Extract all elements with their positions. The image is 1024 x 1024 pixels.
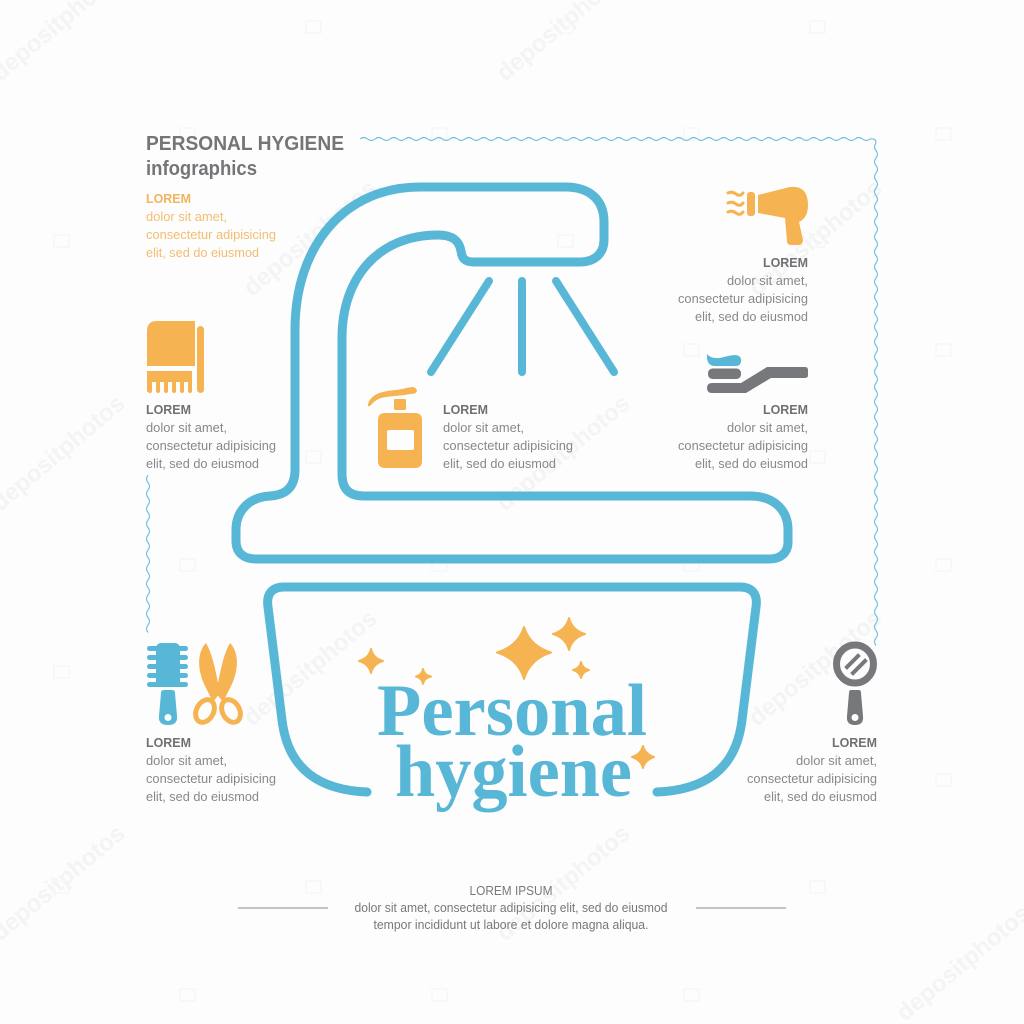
text block: orange intro: elit, sed do eiusmod xyxy=(146,245,259,260)
text block: grooming: dolor sit amet, xyxy=(146,753,227,768)
text block: towel: LOREM xyxy=(146,402,191,417)
basin outline xyxy=(268,587,756,792)
footer text: tempor incididunt ut labore et dolore magna aliqua. xyxy=(374,918,648,932)
text block: soap: LOREM xyxy=(443,402,488,417)
text block: towel: consectetur adipisicing xyxy=(146,438,276,453)
text block: soap: dolor sit amet, xyxy=(443,420,524,435)
text block: mirror: elit, sed do eiusmod xyxy=(764,789,877,804)
title xyxy=(146,133,344,180)
text block: mirror: dolor sit amet, xyxy=(796,753,877,768)
text block: toothbrush: dolor sit amet, xyxy=(727,420,808,435)
watermark pattern: depositphotos xyxy=(744,605,887,732)
text block: hair dryer xyxy=(678,255,808,324)
text block: toothbrush: elit, sed do eiusmod xyxy=(695,456,808,471)
icon: hand mirror xyxy=(836,645,874,725)
text block: grooming: LOREM xyxy=(146,735,191,750)
sparkles xyxy=(359,618,654,768)
watermark pattern: depositphotos xyxy=(239,605,382,732)
text block: hair dryer: dolor sit amet, xyxy=(727,273,808,288)
heading: Personal hygiene: Personal xyxy=(377,670,647,752)
title: PERSONAL HYGIENE xyxy=(146,133,344,155)
text block: soap: elit, sed do eiusmod xyxy=(443,456,556,471)
text block: orange intro: consectetur adipisicing xyxy=(146,227,276,242)
text block: towel: dolor sit amet, xyxy=(146,420,227,435)
icon: towel xyxy=(147,321,204,393)
text block: hair dryer: consectetur adipisicing xyxy=(678,291,808,306)
heading: Personal hygiene: hygiene xyxy=(395,731,632,813)
text block: soap xyxy=(443,402,573,471)
text block: toothbrush: LOREM xyxy=(763,402,808,417)
watermark pattern: depositphotos xyxy=(744,175,887,302)
text block: mirror xyxy=(747,735,877,804)
text block: hair dryer: LOREM xyxy=(763,255,808,270)
water streams xyxy=(431,281,614,372)
text block: grooming: consectetur adipisicing xyxy=(146,771,276,786)
text block: grooming: elit, sed do eiusmod xyxy=(146,789,259,804)
watermark pattern: depositphotos xyxy=(239,175,382,302)
icon: scissors xyxy=(192,643,244,726)
text block: orange intro: LOREM xyxy=(146,191,191,206)
text block: grooming xyxy=(146,735,276,804)
wavy frame xyxy=(146,138,878,646)
text block: orange intro xyxy=(146,191,276,260)
icon: soap dispenser xyxy=(368,387,422,468)
text block: orange intro: dolor sit amet, xyxy=(146,209,227,224)
footer text xyxy=(354,884,668,932)
icon: hair dryer xyxy=(728,187,808,245)
text block: towel xyxy=(146,402,276,471)
text block: toothbrush: consectetur adipisicing xyxy=(678,438,808,453)
icon: toothbrush xyxy=(707,354,808,393)
watermark pattern: depositphotos xyxy=(492,390,635,517)
text block: mirror: LOREM xyxy=(832,735,877,750)
text block: soap: consectetur adipisicing xyxy=(443,438,573,453)
footer text: dolor sit amet, consectetur adipisicing elit, sed do eiusmod xyxy=(354,901,668,915)
footer text: LOREM IPSUM xyxy=(470,884,552,898)
watermark pattern: depositphotos xyxy=(492,820,635,947)
faucet outline xyxy=(236,187,788,559)
text block: towel: elit, sed do eiusmod xyxy=(146,456,259,471)
title: infographics xyxy=(146,158,257,180)
text block: toothbrush xyxy=(678,402,808,471)
text block: mirror: consectetur adipisicing xyxy=(747,771,877,786)
icon: hair brush xyxy=(147,643,188,725)
heading: Personal hygiene xyxy=(377,670,647,813)
text block: hair dryer: elit, sed do eiusmod xyxy=(695,309,808,324)
